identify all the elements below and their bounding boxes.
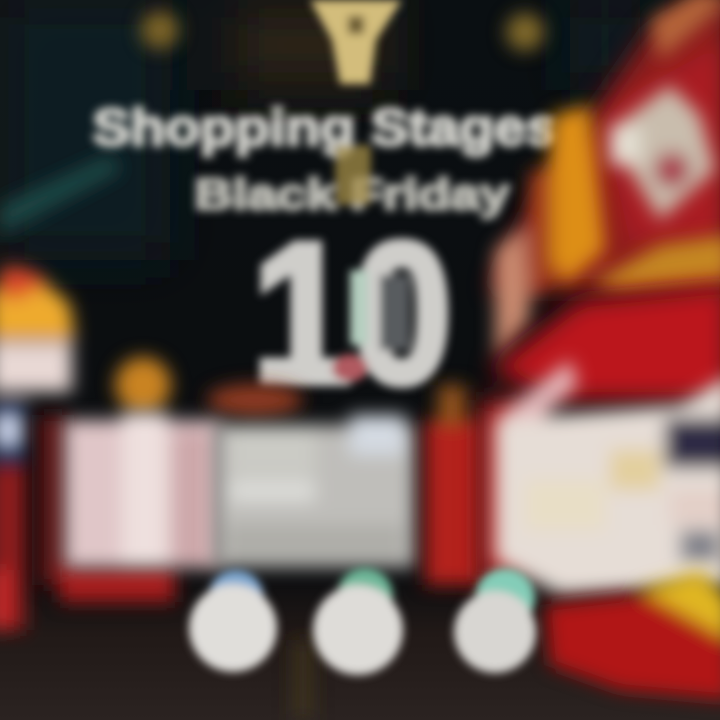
gift bow star: [610, 85, 715, 220]
background glow: [0, 0, 640, 260]
teal streak: [0, 155, 122, 235]
icon: circle badge 2: [313, 568, 403, 675]
gift ribbon orange: [495, 0, 720, 360]
icon: circle badge 3: [454, 568, 536, 673]
gift lid: [490, 0, 720, 290]
icon: circle badge 1: [189, 570, 277, 672]
background lights: [141, 11, 544, 720]
card backdrop: gift tops: [38, 357, 303, 602]
number: 10: 10: [252, 202, 452, 425]
title: Shopping Stages: [92, 99, 558, 157]
gift base: [545, 570, 720, 700]
gift body red: [480, 285, 720, 580]
left gift: orange and white ornament: [0, 267, 75, 630]
card: right grey block with text: [215, 415, 415, 567]
card: left pink block: [64, 412, 220, 568]
centre red ribbon column: [425, 385, 480, 585]
gift white label: [495, 360, 720, 595]
title: Black Friday: [194, 170, 510, 219]
panel: stage cards: [38, 357, 415, 602]
right gift box: [480, 0, 720, 700]
title: [92, 99, 558, 219]
icon: trophy: [310, 0, 402, 84]
